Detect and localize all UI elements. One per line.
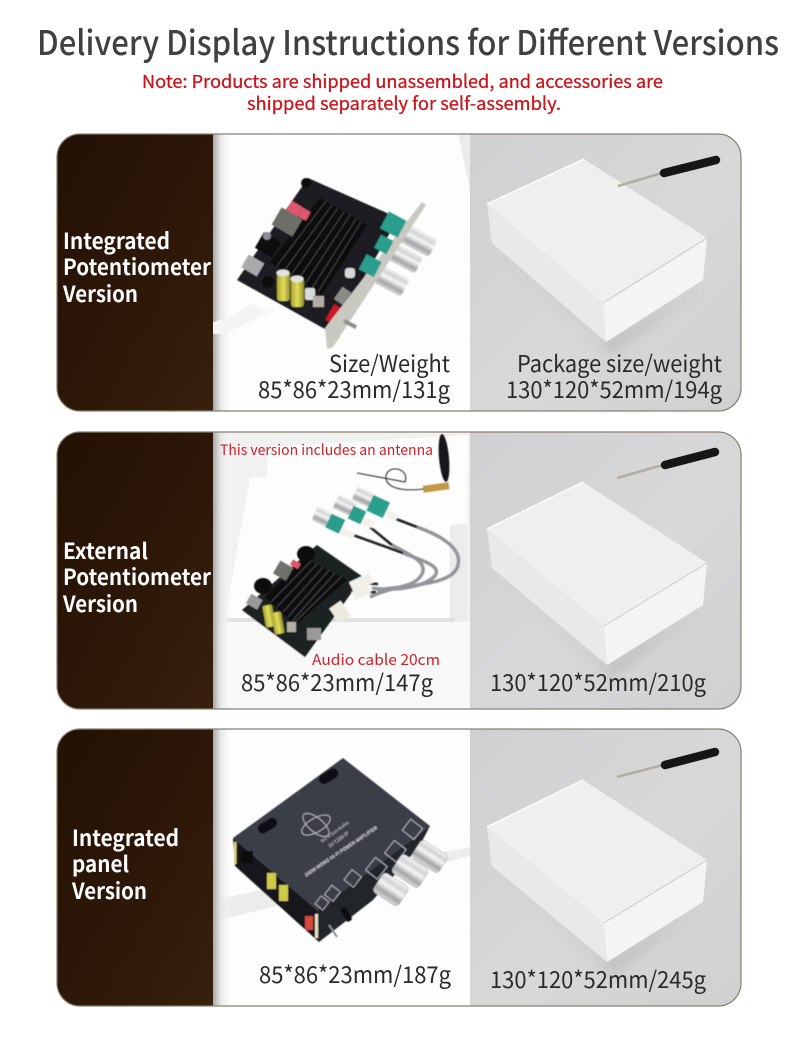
label: external potentiometer version: Potentiometer (63, 560, 211, 592)
panel: external potentiometer version (57, 432, 741, 709)
panel: integrated potentiometer version (57, 134, 741, 411)
label: external potentiometer version: Version (62, 587, 138, 619)
size and weight (258, 345, 450, 405)
label: integrated potentiometer version (62, 224, 211, 309)
product photo: enclosed amplifier with panel: XY-T200 IP (327, 830, 350, 850)
package size and weight (506, 345, 722, 405)
label: integrated potentiometer version: Version (62, 277, 138, 309)
package size and weight: Package size/weight (517, 345, 722, 379)
size and weight: 85*86*23mm/131g (258, 371, 450, 405)
size and weight: Size/Weight (329, 345, 450, 379)
label: external potentiometer version (62, 534, 211, 619)
label: integrated panel version: Version (71, 874, 147, 906)
package photo: white box and screwdriver (487, 752, 715, 972)
package size and weight: 130*120*52mm/194g (506, 371, 722, 405)
label: integrated potentiometer version: Integrated (63, 224, 170, 256)
label: external potentiometer version: External (63, 534, 148, 566)
package size and weight: 130*120*52mm/210g (490, 664, 706, 698)
package size and weight: 130*120*52mm/245g (490, 961, 706, 995)
product photo: enclosed amplifier with panel: 200W MONO HI-FI POWER AMPLIFIER (303, 824, 379, 879)
panel: integrated panel version (57, 729, 741, 1006)
package photo: white box and screwdriver (487, 452, 715, 675)
callout: audio cable length: Audio cable 20cm (312, 649, 440, 670)
product photo: board with mounting plate (237, 178, 438, 349)
callout: antenna included: This version includes an antenna (220, 439, 433, 460)
note: shipping notice: Note: Products are shipped unassembled, and accessories are (142, 68, 663, 94)
package photo: white box and screwdriver (487, 159, 716, 352)
label: integrated potentiometer version: Potentiometer (63, 250, 211, 282)
note: shipping notice (142, 68, 663, 116)
product photo: enclosed amplifier with panel: Xin Yi Sun Audio (319, 819, 351, 845)
label: integrated panel version: Integrated (72, 821, 179, 853)
size and weight: 85*86*23mm/147g (241, 664, 433, 698)
note: shipping notice: shipped separately for self-assembly. (247, 90, 561, 116)
product photo: board, cables, potentiometers and antenna (242, 434, 459, 657)
label: integrated panel version (71, 821, 179, 906)
size and weight: 85*86*23mm/187g (259, 956, 451, 990)
label: integrated panel version: panel (72, 847, 129, 879)
product photo: enclosed amplifier with panel (233, 758, 449, 942)
